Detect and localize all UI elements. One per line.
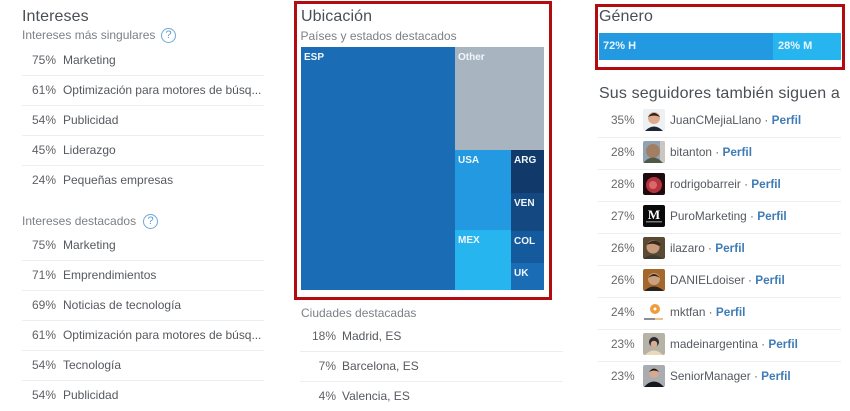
list: seguidores <box>598 109 841 387</box>
list: intereses singulares: 54% <box>32 113 56 127</box>
cell: VEN <box>511 193 544 231</box>
row: rodrigobarreir: 28% <box>611 177 635 191</box>
heading: sus seguidores también siguen a: Sus seguidores también siguen a <box>599 85 840 102</box>
list: ciudades: 7% <box>319 359 336 373</box>
icon: help <box>143 214 158 229</box>
row: mktfan: mktfan · Perfil <box>670 305 745 319</box>
bar: mujeres <box>773 33 840 60</box>
heading: intereses: Intereses <box>22 8 89 25</box>
list: intereses destacados: 71% <box>32 268 56 282</box>
list: intereses destacados: 54% <box>32 358 56 372</box>
list: intereses singulares: 75% <box>32 53 56 67</box>
cell: UK: UK <box>514 268 528 279</box>
row: madeinargentina <box>611 333 798 355</box>
cell: ARG: ARG <box>514 155 536 166</box>
row: rodrigobarreir: rodrigobarreir · Perfil <box>670 177 781 191</box>
list: intereses singulares: 24% <box>32 173 56 187</box>
list: intereses destacados: Emprendimientos <box>63 268 156 282</box>
panel: ubicación (red frame) <box>294 1 552 300</box>
list: intereses destacados: Marketing <box>63 238 116 252</box>
list: intereses singulares: Marketing <box>63 53 116 67</box>
subheading: intereses destacados: Intereses destacados <box>22 214 136 228</box>
list: intereses destacados: Noticias de tecnología <box>63 298 181 312</box>
panel: género (red frame) <box>595 4 845 70</box>
list: intereses destacados: 61% <box>32 328 56 342</box>
bar: hombres <box>599 33 773 60</box>
list: intereses singulares: Pequeñas empresas <box>63 173 173 187</box>
cell: COL: COL <box>514 236 535 247</box>
list: ciudades: 4% <box>319 389 336 403</box>
cell: USA: USA <box>458 155 479 166</box>
bar: mujeres: 28% M <box>778 40 812 52</box>
row: bitanton: bitanton · Perfil <box>670 145 752 159</box>
subheading: países y estados destacados: Países y estados destacados <box>300 29 457 43</box>
subheading: ciudades destacadas: Ciudades destacadas <box>301 306 416 320</box>
cell: ESP <box>301 47 455 290</box>
row: madeinargentina: 23% <box>611 337 635 351</box>
list: ciudades: Valencia, ES <box>342 389 410 403</box>
list: intereses singulares: 61% <box>32 83 56 97</box>
list: intereses singulares: 45% <box>32 143 56 157</box>
list: intereses destacados <box>22 238 264 402</box>
row: SeniorManager: 23% <box>611 369 635 383</box>
list: ciudades: Barcelona, ES <box>342 359 419 373</box>
row: SeniorManager <box>611 365 791 387</box>
list: intereses destacados: 69% <box>32 298 56 312</box>
cell: MEX <box>455 230 511 290</box>
list: ciudades: 18% <box>312 329 336 343</box>
list: intereses singulares: Publicidad <box>63 113 118 127</box>
cell: ESP: ESP <box>304 52 324 63</box>
list: intereses destacados: Tecnología <box>63 358 121 372</box>
panel: ciudades destacadas <box>300 306 563 403</box>
cell: ARG <box>511 150 544 193</box>
icon: help: ? <box>147 215 154 227</box>
list: ciudades: Madrid, ES <box>342 329 401 343</box>
list: intereses destacados: 75% <box>32 238 56 252</box>
row: mktfan <box>611 304 745 320</box>
icon: help <box>161 28 176 43</box>
row: DANIELdoiser: 26% <box>611 273 635 287</box>
row: ilazaro: ilazaro · Perfil <box>670 241 745 255</box>
row: DANIELdoiser: DANIELdoiser · Perfil <box>670 273 785 287</box>
list: intereses singulares <box>22 53 264 187</box>
cell: Other <box>455 47 544 150</box>
list: intereses singulares: Liderazgo <box>63 143 116 157</box>
row: PuroMarketing <box>611 205 787 227</box>
list: intereses destacados: Publicidad <box>63 388 118 402</box>
row: mktfan: 24% <box>611 305 635 319</box>
row: bitanton: 28% <box>611 145 635 159</box>
row: ilazaro: 26% <box>611 241 635 255</box>
subheading: intereses más singulares: Intereses más singulares <box>22 28 155 42</box>
row: JuanCMejiaLlano: 35% <box>611 113 635 127</box>
cell: VEN: VEN <box>514 198 535 209</box>
cell: USA <box>455 150 511 230</box>
list: intereses singulares: Optimización para motores de búsq... <box>63 83 261 97</box>
cell: MEX: MEX <box>458 235 480 246</box>
row: SeniorManager: SeniorManager · Perfil <box>670 369 791 383</box>
row: PuroMarketing: M <box>648 207 660 222</box>
icon: help: ? <box>165 29 172 41</box>
treemap <box>301 47 544 290</box>
cell: COL <box>511 231 544 263</box>
row: PuroMarketing: 27% <box>611 209 635 223</box>
row: PuroMarketing: PuroMarketing · Perfil <box>670 209 787 223</box>
row: ilazaro <box>611 237 745 259</box>
cell: Other: Other <box>458 52 485 63</box>
list: ciudades <box>300 329 563 403</box>
heading: ubicación: Ubicación <box>301 8 372 25</box>
row: madeinargentina: madeinargentina · Perfil <box>670 337 798 351</box>
row: JuanCMejiaLlano <box>611 109 801 131</box>
panel: intereses <box>22 8 264 402</box>
cell: UK <box>511 263 544 290</box>
row: rodrigobarreir <box>611 173 781 195</box>
heading: género: Género <box>599 8 653 25</box>
bar: hombres: 72% H <box>603 40 636 52</box>
row: JuanCMejiaLlano: JuanCMejiaLlano · Perfil <box>670 113 801 127</box>
list: intereses destacados: 54% <box>32 388 56 402</box>
row: DANIELdoiser <box>611 269 785 291</box>
row: bitanton <box>611 141 752 163</box>
list: intereses destacados: Optimización para motores de búsq... <box>63 328 261 342</box>
